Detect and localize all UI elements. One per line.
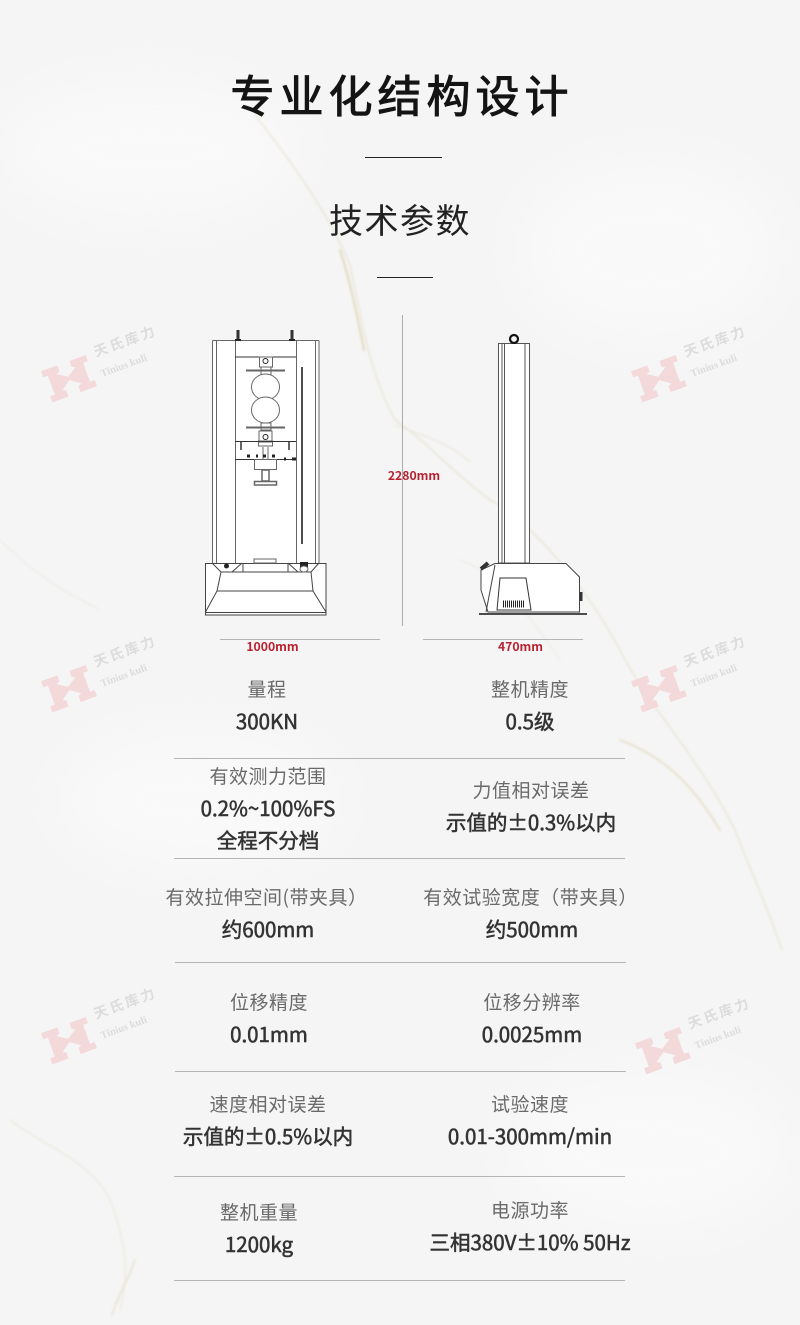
- row rule: [175, 962, 626, 963]
- spec: displacement accuracy: [230, 988, 308, 1048]
- spec: force error: 力值相对误差: [472, 776, 590, 803]
- spec: force error: 示值的±0.3%以内: [446, 806, 616, 836]
- title divider: [365, 157, 442, 158]
- watermark: lower right: [635, 992, 754, 1074]
- watermark: top left: 天氏库力: [91, 320, 160, 362]
- watermark: lower left: [41, 982, 160, 1064]
- width dimension: front: [220, 639, 380, 640]
- spec: tensile space: [166, 883, 367, 943]
- spec: power supply: 三相380V±10% 50Hz: [429, 1226, 631, 1256]
- spec: displacement resolution: [482, 988, 582, 1048]
- row rule: [174, 1176, 625, 1177]
- watermark: top right: Tinius kuli: [689, 353, 739, 380]
- spec: test width: 有效试验宽度（带夹具）: [423, 883, 638, 910]
- spec: tensile space: 约600mm: [222, 913, 314, 943]
- spec: range: 量程: [247, 675, 287, 702]
- spec: test width: [423, 883, 638, 943]
- side view of machine diagram: [479, 334, 587, 615]
- watermark: top right: 天氏库力: [681, 320, 750, 362]
- spec: displacement resolution: 0.0025mm: [482, 1018, 582, 1048]
- watermark: top left: Tinius kuli: [99, 353, 149, 380]
- watermark: lower right: 天氏库力: [685, 992, 754, 1034]
- watermark: lower right: Tinius kuli: [693, 1025, 743, 1052]
- spec: tensile space: 有效拉伸空间(带夹具）: [166, 883, 367, 910]
- spec: force range: 有效测力范围: [209, 762, 327, 789]
- spec: range: 300KN: [236, 705, 298, 735]
- spec: machine accuracy: [491, 675, 569, 735]
- spec: machine weight: [220, 1198, 298, 1258]
- watermark: middle right: [631, 630, 750, 712]
- watermark: top left: [41, 320, 160, 402]
- spec: force range: 全程不分档: [217, 824, 319, 854]
- spec: force range: [201, 762, 335, 854]
- spec: test width: 约500mm: [486, 913, 578, 943]
- watermark: top right: [631, 320, 750, 402]
- width label: front: 1000mm: [246, 637, 299, 655]
- watermark: middle left: Tinius kuli: [99, 663, 149, 690]
- vertical divider: [402, 315, 403, 626]
- spec: displacement accuracy: 位移精度: [230, 988, 308, 1015]
- spec: displacement accuracy: 0.01mm: [230, 1018, 308, 1048]
- spec: machine accuracy: 整机精度: [491, 675, 569, 702]
- row rule: [175, 1071, 626, 1072]
- spec: test speed: 0.01-300mm/min: [448, 1120, 612, 1150]
- width dimension: side: [423, 639, 583, 640]
- spec: machine weight: 1200kg: [225, 1228, 293, 1258]
- row rule: [174, 1280, 625, 1281]
- spec: speed error: 速度相对误差: [209, 1090, 327, 1117]
- spec: speed error: [183, 1090, 353, 1150]
- spec: force range: 0.2%~100%FS: [201, 792, 335, 822]
- front view of machine diagram: [205, 330, 326, 616]
- spec: range: [236, 675, 298, 735]
- height dimension: 2280mm: [388, 466, 440, 484]
- spec: machine weight: 整机重量: [220, 1198, 298, 1225]
- spec: machine accuracy: 0.5级: [506, 705, 554, 735]
- spec: force error: [446, 776, 616, 836]
- watermark: middle left: [41, 630, 160, 712]
- spec: test speed: 试验速度: [491, 1090, 569, 1117]
- watermark: middle right: 天氏库力: [681, 630, 750, 672]
- spec: displacement resolution: 位移分辨率: [483, 988, 581, 1015]
- watermark: middle right: Tinius kuli: [689, 663, 739, 690]
- row rule: [174, 758, 625, 759]
- watermark: middle left: 天氏库力: [91, 630, 160, 672]
- spec: power supply: 电源功率: [491, 1196, 569, 1223]
- spec: speed error: 示值的±0.5%以内: [183, 1120, 353, 1150]
- spec: power supply: [429, 1196, 631, 1256]
- watermark: lower left: Tinius kuli: [99, 1015, 149, 1042]
- watermark: lower left: 天氏库力: [91, 982, 160, 1024]
- title: 专业化结构设计: [230, 61, 574, 125]
- subtitle: 技术参数: [329, 194, 471, 243]
- width label: side: 470mm: [498, 637, 543, 655]
- subtitle divider: [377, 277, 433, 278]
- spec: test speed: [448, 1090, 612, 1150]
- row rule: [174, 858, 625, 859]
